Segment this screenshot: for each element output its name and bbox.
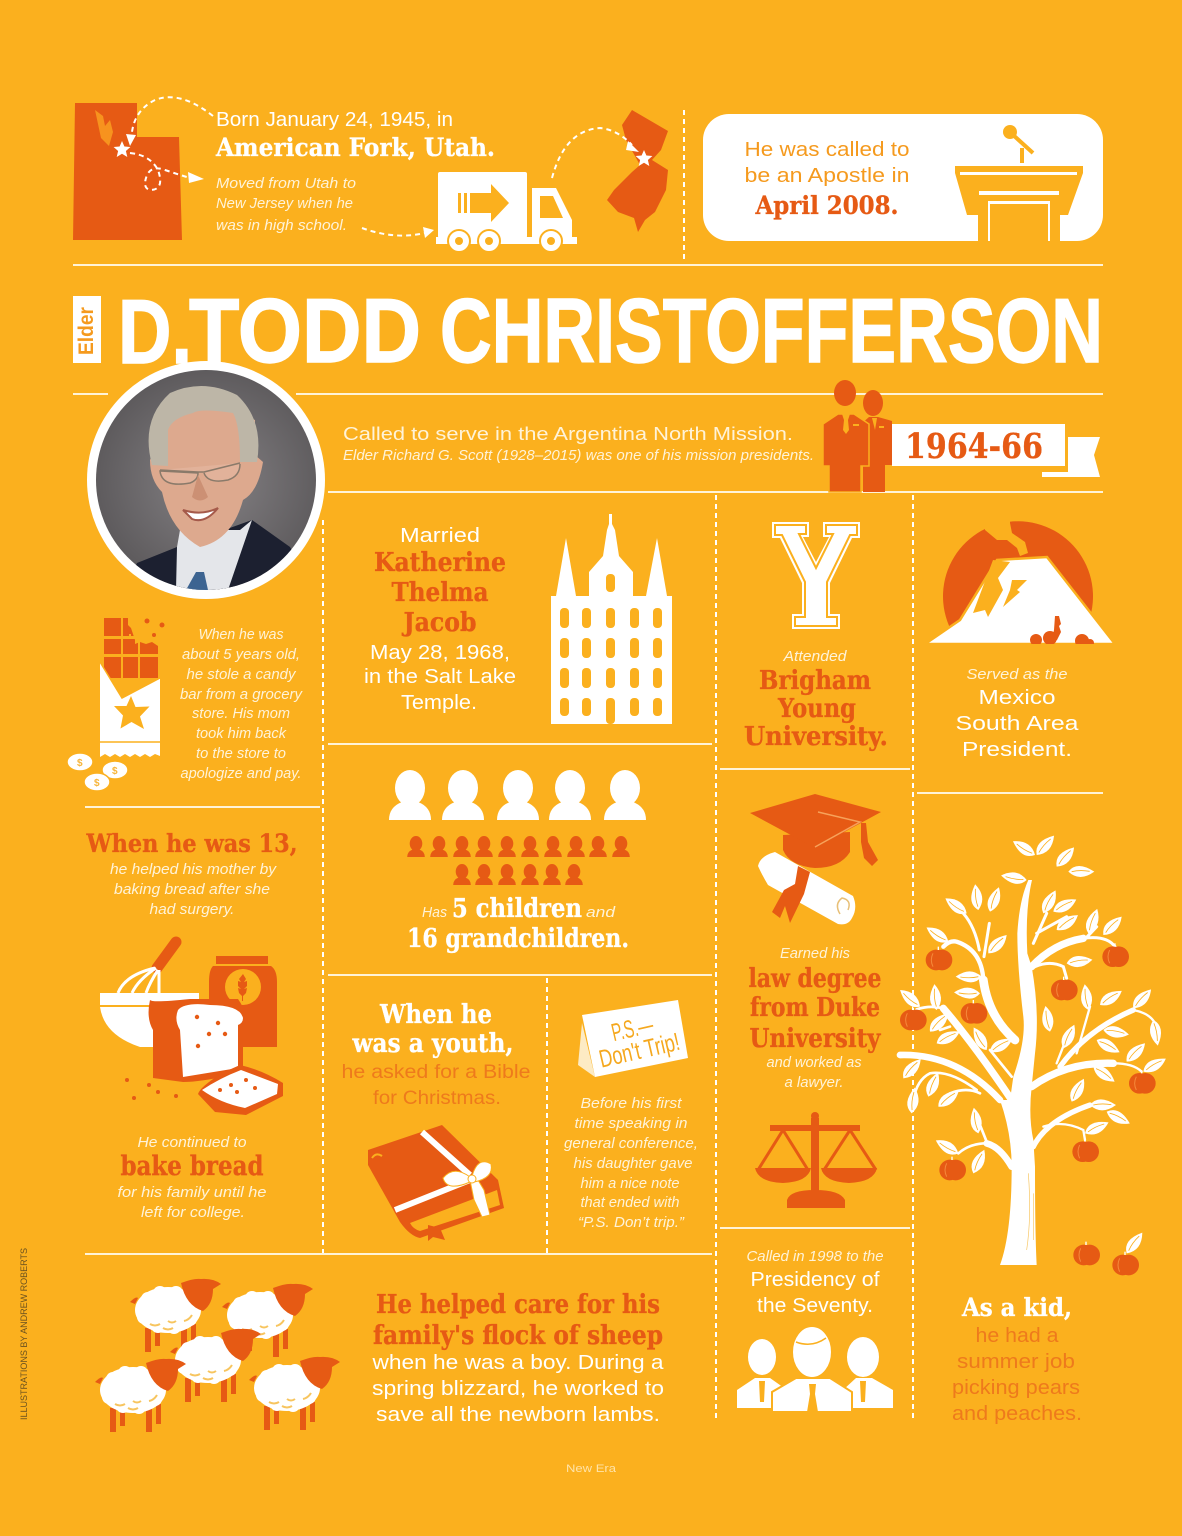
icon: pulpit bbox=[955, 125, 1083, 241]
label: Elder: Elder bbox=[75, 307, 98, 355]
text: youth: he asked for a Bible bbox=[342, 1061, 530, 1083]
text: move note: New Jersey when he bbox=[216, 196, 353, 212]
icon: sixteen grandchildren bbox=[407, 836, 630, 885]
text: youth: When he bbox=[379, 1000, 492, 1030]
panel: birthplace and move bbox=[73, 97, 668, 252]
icon: cap and diploma bbox=[750, 794, 881, 924]
text: age 13: baking bread after she bbox=[114, 882, 270, 898]
text: law degree: and worked as bbox=[766, 1055, 862, 1071]
panel: baking bread bbox=[86, 829, 297, 1221]
text: age 13 bbox=[86, 829, 297, 918]
text: BYU: Attended bbox=[782, 649, 848, 665]
icon: three leaders bbox=[737, 1326, 893, 1412]
text: marriage: in the Salt Lake bbox=[364, 666, 516, 688]
icon: P.S. note card: P.S.— bbox=[609, 1010, 656, 1047]
text: marriage: Temple. bbox=[401, 692, 477, 714]
panel: Mexico South Area bbox=[925, 515, 1115, 761]
text: age 13: had surgery. bbox=[150, 902, 234, 918]
title bbox=[73, 281, 1103, 383]
text: candy story: When he was bbox=[198, 627, 284, 643]
text: move note: was in high school. bbox=[216, 218, 347, 234]
text: sheep story: save all the newborn lambs. bbox=[376, 1404, 660, 1426]
icon: flock of sheep bbox=[95, 1279, 340, 1432]
text: note story: “P.S. Don’t trip.” bbox=[578, 1215, 685, 1231]
text: family counts: 5 children bbox=[452, 894, 582, 924]
arrow: to truck bbox=[362, 227, 434, 238]
text: note story: time speaking in bbox=[574, 1116, 688, 1132]
footer: publication name: New Era bbox=[566, 1463, 617, 1475]
icon: candy bar and coins: $ bbox=[94, 778, 100, 789]
credit: illustrator: ILLUSTRATIONS BY ANDREW ROBERTS bbox=[19, 1248, 29, 1420]
text: family counts: and bbox=[586, 905, 616, 921]
icon: fruit tree bbox=[896, 832, 1169, 1275]
text: note story: him a nice note bbox=[580, 1176, 680, 1192]
icon: moving truck bbox=[436, 172, 577, 252]
text: note story: that ended with bbox=[580, 1195, 680, 1211]
text: marriage bbox=[364, 525, 516, 714]
text: mission: Called to serve in the Argentina North Mission. bbox=[343, 423, 793, 444]
text: sheep story: family's flock of sheep bbox=[373, 1321, 663, 1351]
text: marriage: Jacob bbox=[402, 608, 476, 638]
icon: gift-wrapped Bible bbox=[368, 1125, 504, 1241]
icon: mountain and sun bbox=[929, 521, 1112, 644]
text: BYU: University. bbox=[744, 722, 888, 752]
text: candy story: to the store to bbox=[196, 746, 286, 762]
icon: Salt Lake Temple bbox=[551, 514, 672, 724]
text: presidency: Called in 1998 to the bbox=[746, 1249, 884, 1265]
panel: law degree bbox=[748, 794, 882, 1208]
text: BYU: Brigham bbox=[759, 666, 871, 696]
icon: scales of justice bbox=[755, 1112, 877, 1208]
text: presidency: the Seventy. bbox=[757, 1295, 873, 1317]
text: note story: his daughter gave bbox=[574, 1156, 692, 1172]
text: area president: President. bbox=[962, 738, 1072, 761]
text: age 13: When he was 13, bbox=[86, 829, 297, 858]
icon: candy bar and coins: $ bbox=[77, 758, 83, 769]
text: law degree: from Duke bbox=[750, 993, 880, 1023]
text: BYU: Young bbox=[777, 694, 856, 724]
panel: mission bbox=[343, 380, 1100, 492]
text: candy story: apologize and pay. bbox=[180, 766, 302, 782]
icon: missionaries bbox=[823, 380, 892, 492]
panel: childhood candy bar bbox=[67, 618, 303, 791]
text: summer job: summer job bbox=[957, 1351, 1075, 1373]
text: presidency: Presidency of bbox=[750, 1269, 880, 1291]
icon: candy bar and coins bbox=[67, 618, 164, 791]
text: sheep story: He helped care for his bbox=[376, 1290, 660, 1320]
icon: candy bar and coins: $ bbox=[112, 766, 118, 777]
text: mission bbox=[343, 423, 814, 464]
text: sheep story: when he was a boy. During a bbox=[371, 1352, 664, 1374]
text: marriage: Katherine bbox=[374, 548, 506, 578]
text: age 13: he helped his mother by bbox=[110, 862, 277, 878]
text: note story bbox=[564, 1096, 698, 1231]
text: bake bread: left for college. bbox=[141, 1205, 245, 1221]
panel: sheep bbox=[95, 1279, 664, 1432]
banner: mission years bbox=[892, 424, 1100, 477]
text: presidency bbox=[746, 1249, 884, 1317]
icon: Utah map bbox=[73, 103, 182, 240]
panel: apostle call bbox=[703, 114, 1103, 241]
text: candy story: store. His mom bbox=[192, 706, 290, 722]
text: youth: was a youth, bbox=[352, 1029, 514, 1059]
text: area president bbox=[956, 667, 1079, 761]
text: note story: general conference, bbox=[564, 1136, 698, 1152]
text: law degree: law degree bbox=[748, 964, 882, 994]
text: candy story: bar from a grocery bbox=[180, 687, 303, 703]
arrow: birthplace loop bbox=[126, 97, 213, 190]
heading: name: D. bbox=[118, 282, 192, 383]
icon: block Y bbox=[772, 522, 860, 629]
text: bake bread: for his family until he bbox=[118, 1185, 266, 1201]
heading: name bbox=[118, 281, 1103, 383]
text: summer job: and peaches. bbox=[952, 1403, 1082, 1425]
panel dividers bbox=[73, 110, 1103, 1420]
text: apostle call: He was called to bbox=[744, 138, 910, 161]
panel: Presidency of the Seventy bbox=[737, 1249, 893, 1412]
panel: BYU bbox=[744, 522, 888, 752]
text: mission: Elder Richard G. Scott (1928–2015) was one of his mission presidents. bbox=[343, 448, 814, 464]
text: candy story: he stole a candy bbox=[186, 667, 296, 683]
text: sheep story: spring blizzard, he worked to bbox=[372, 1378, 664, 1400]
text: area president: Mexico bbox=[978, 686, 1056, 709]
icon: five children bbox=[389, 770, 646, 820]
text: summer job: As a kid, bbox=[961, 1293, 1072, 1322]
panel: marriage bbox=[364, 514, 672, 724]
text: summer job bbox=[952, 1293, 1082, 1425]
banner: mission years: 1964-66 bbox=[905, 426, 1043, 467]
text: sheep story bbox=[371, 1290, 664, 1426]
text: bake bread: He continued to bbox=[138, 1135, 246, 1151]
text: youth bbox=[342, 1000, 530, 1109]
icon: baking bbox=[100, 942, 283, 1115]
panel: family bbox=[389, 770, 646, 954]
text: law degree bbox=[748, 946, 882, 1091]
text: area president: South Area bbox=[956, 712, 1079, 735]
panel: Bible for Christmas bbox=[342, 1000, 530, 1241]
text: family counts: Has bbox=[422, 905, 447, 921]
text: family counts bbox=[407, 894, 629, 954]
text: summer job: picking pears bbox=[952, 1377, 1080, 1399]
icon: P.S. note card: Don't Trip! bbox=[596, 1028, 683, 1074]
text: apostle call: be an Apostle in bbox=[744, 164, 910, 187]
text: BYU bbox=[744, 649, 888, 752]
text: marriage: Thelma bbox=[392, 578, 489, 608]
icon: P.S. note card bbox=[578, 1000, 688, 1077]
arrow: to New Jersey bbox=[552, 128, 639, 178]
heading: name: TODD bbox=[189, 281, 421, 382]
text: marriage: Married bbox=[400, 525, 480, 547]
text: apostle call bbox=[744, 138, 910, 220]
icon: New Jersey map bbox=[607, 110, 668, 232]
text: bake bread: bake bread bbox=[120, 1151, 264, 1182]
label: Elder bbox=[73, 296, 101, 363]
text: youth: for Christmas. bbox=[373, 1087, 501, 1109]
text: summer job: he had a bbox=[976, 1325, 1059, 1347]
panel: note from daughter bbox=[564, 1000, 698, 1231]
text: family counts: 16 grandchildren. bbox=[407, 924, 629, 954]
text: candy story bbox=[180, 627, 303, 782]
text: birth date: Born January 24, 1945, in bbox=[216, 109, 453, 131]
text: candy story: took him back bbox=[196, 726, 287, 742]
text: area president: Served as the bbox=[966, 667, 1068, 683]
text: law degree: University bbox=[750, 1024, 881, 1054]
text: move note: Moved from Utah to bbox=[216, 176, 356, 192]
text: move note bbox=[216, 176, 356, 234]
text: bake bread bbox=[118, 1135, 266, 1221]
text: law degree: Earned his bbox=[780, 946, 850, 962]
text: birthplace: American Fork, Utah. bbox=[215, 133, 495, 162]
text: note story: Before his first bbox=[580, 1096, 683, 1112]
text: apostle call: April 2008. bbox=[755, 191, 898, 220]
text: candy story: about 5 years old, bbox=[182, 647, 300, 663]
text: marriage: May 28, 1968, bbox=[370, 642, 510, 664]
text: law degree: a lawyer. bbox=[784, 1075, 844, 1091]
portrait photo bbox=[87, 361, 330, 600]
